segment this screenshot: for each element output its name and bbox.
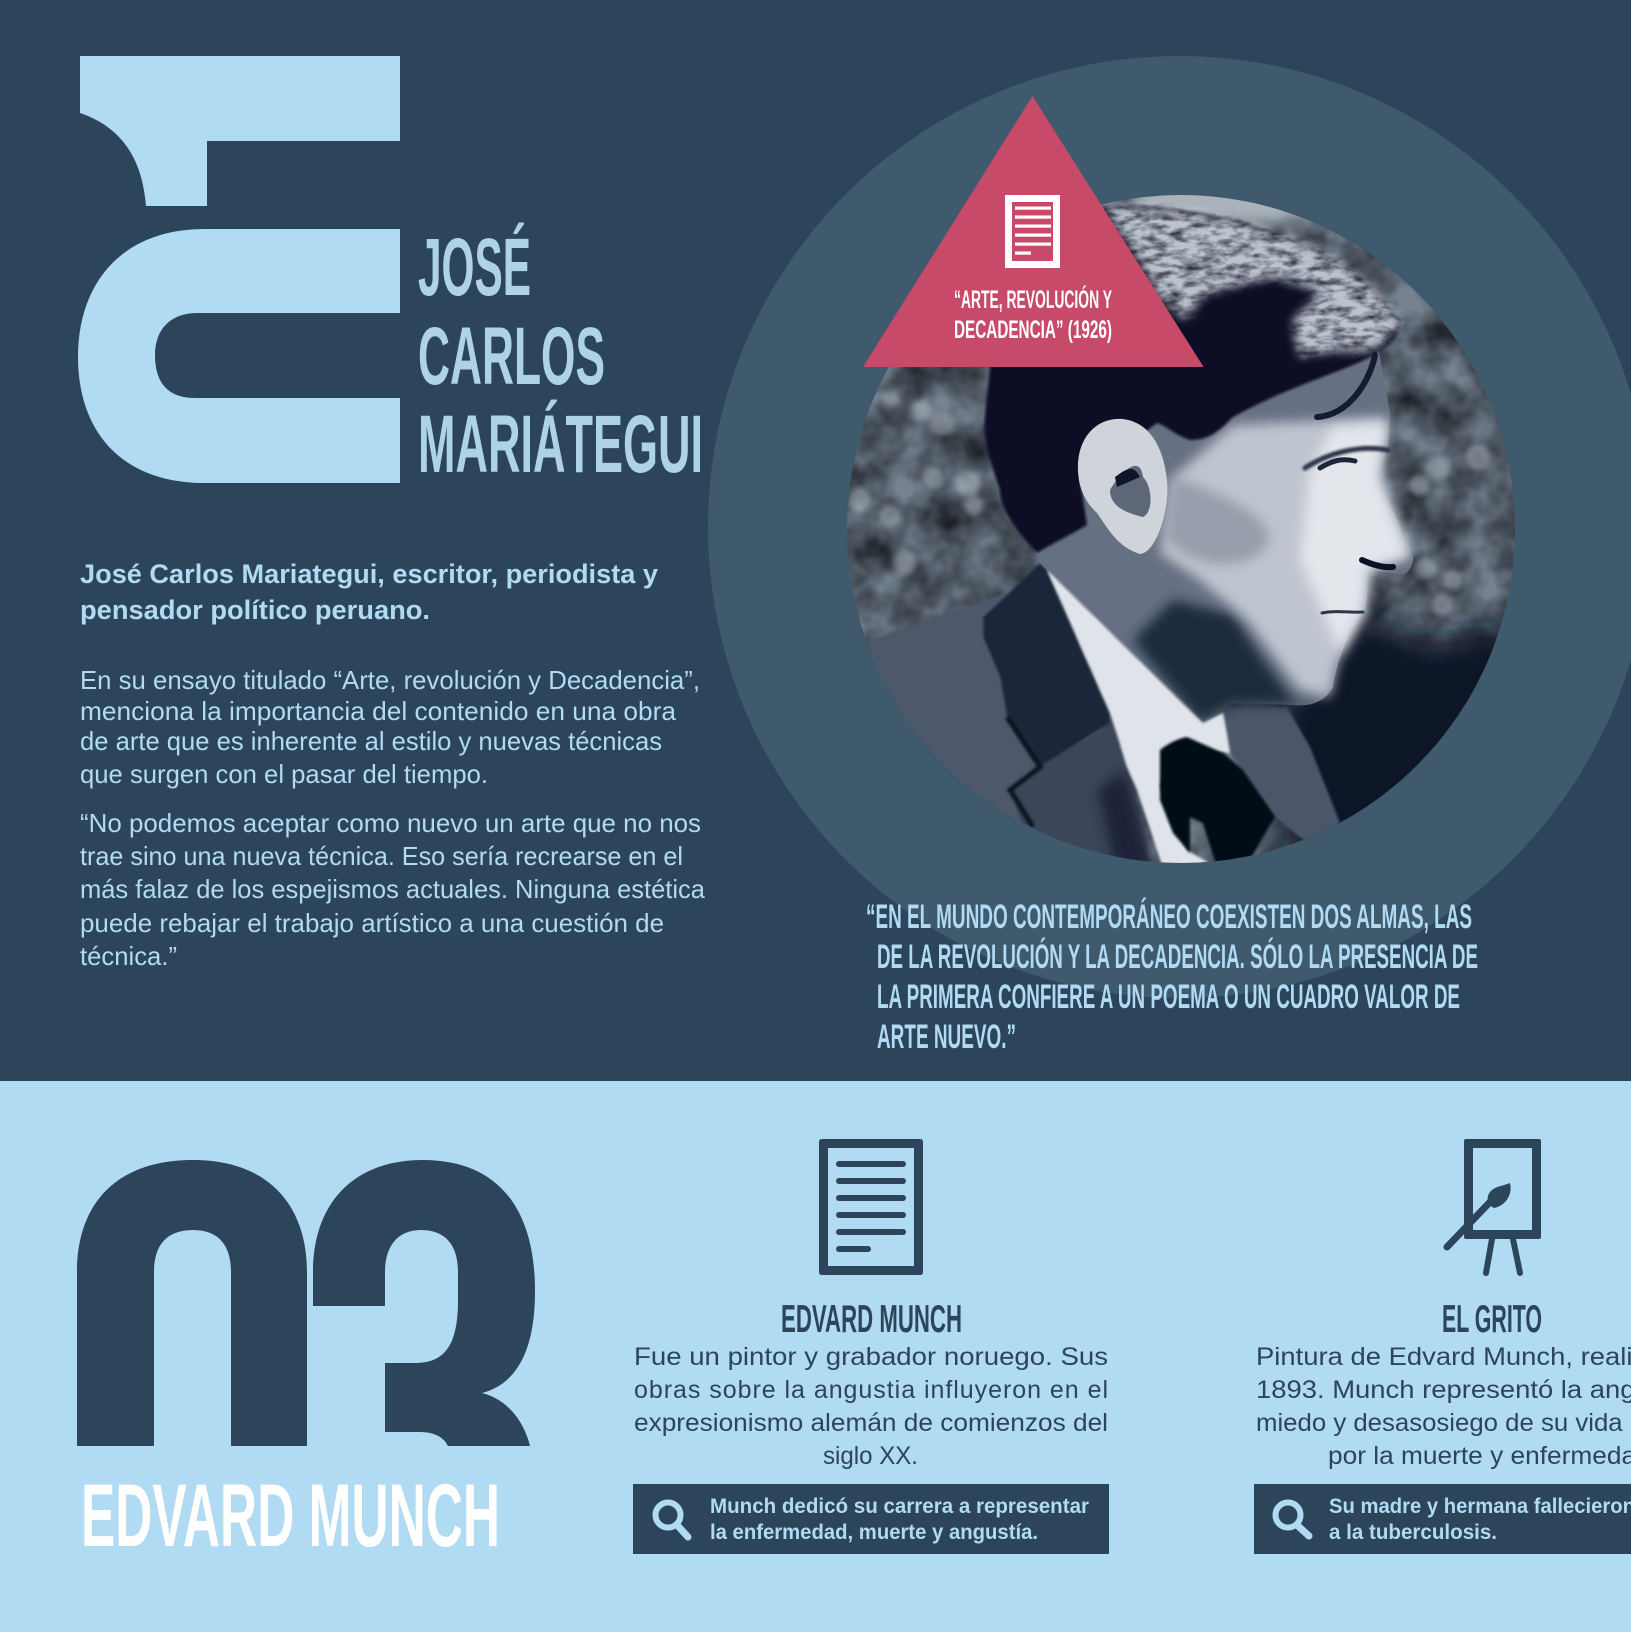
icon: document [819, 1139, 923, 1275]
eye, brow, nostril and mouth details [1305, 448, 1393, 613]
numeral 03 rotated [77, 1160, 535, 1446]
collar [1047, 570, 1230, 868]
intro text block: pensador político peruano. [80, 595, 430, 625]
body paragraph: quotation [80, 808, 706, 971]
body paragraph: quotation: “No podemos aceptar como nuevo un arte que no nos [80, 808, 701, 838]
icon: magnifier [656, 1502, 688, 1537]
heading: Edvard Munch: EDVARD MUNCH [81, 1465, 500, 1565]
callout: Munch dedicó su carrera a representar [710, 1495, 1089, 1518]
column text [1256, 1343, 1631, 1470]
column text: obras sobre la angustia influyeron en el [634, 1376, 1108, 1404]
column text: siglo XX. [823, 1442, 918, 1470]
column: Edvard Munch [633, 1139, 1109, 1554]
body paragraph: quotation: técnica.” [80, 941, 177, 971]
body paragraph: quotation: trae sino una nueva técnica. Eso sería recrearse en el [80, 841, 683, 871]
badge text [954, 284, 1112, 344]
portrait photo [840, 178, 1530, 880]
callout: la enfermedad, muerte y angustía. [710, 1521, 1038, 1544]
background circle [708, 56, 1631, 998]
column text [634, 1343, 1108, 1470]
intro text block: José Carlos Mariategui, escritor, periodista y [80, 559, 658, 589]
body paragraph: essay: menciona la importancia del contenido en una obra [80, 696, 677, 726]
column heading: EL GRITO [1442, 1298, 1542, 1341]
body paragraph: essay: que surgen con el pasar del tiempo. [80, 759, 488, 789]
icon: document [1005, 195, 1060, 268]
hair [985, 205, 1400, 553]
icon: easel and brush [1447, 1139, 1541, 1273]
column: El Grito [1254, 1139, 1631, 1554]
badge text: DECADENCIA” (1926) [954, 316, 1112, 344]
panel: dark top section [0, 0, 1631, 1081]
body paragraph: essay [80, 665, 700, 789]
body paragraph: quotation: más falaz de los espejismos actuales. Ninguna estética [80, 874, 706, 904]
numeral 02 rotated [78, 56, 400, 483]
title: José Carlos Mariátegui: MARIÁTEGUI [418, 399, 703, 490]
body paragraph: quotation: puede rebajar el trabajo artístico a una cuestión de [80, 908, 664, 938]
icon: magnifier [1276, 1502, 1309, 1536]
callout [633, 1484, 1109, 1554]
column heading: EDVARD MUNCH [781, 1298, 962, 1341]
triangle badge [863, 96, 1204, 367]
jacket [850, 563, 1340, 880]
title: José Carlos Mariátegui: JOSÉ [418, 222, 531, 313]
panel: light bottom section [0, 1081, 1631, 1632]
title: José Carlos Mariátegui: CARLOS [418, 311, 605, 402]
badge text: “ARTE, REVOLUCIÓN Y [954, 284, 1112, 314]
callout: a la tuberculosis. [1329, 1521, 1497, 1544]
column text: Fue un pintor y grabador noruego. Sus [634, 1343, 1108, 1371]
body paragraph: essay: En su ensayo titulado “Arte, revolución y Decadencia”, [80, 665, 700, 695]
bow tie [1160, 737, 1275, 868]
pull quote [866, 898, 1478, 1056]
ear [1078, 419, 1167, 554]
body paragraph: essay: de arte que es inherente al estilo y nuevas técnicas [80, 726, 662, 756]
intro text block [80, 559, 658, 625]
callout [1254, 1484, 1631, 1554]
face and neck [1000, 340, 1413, 723]
title: José Carlos Mariátegui [418, 222, 703, 490]
pull quote: ARTE NUEVO.” [877, 1018, 1016, 1056]
column text: expresionismo alemán de comienzos del [634, 1409, 1108, 1437]
